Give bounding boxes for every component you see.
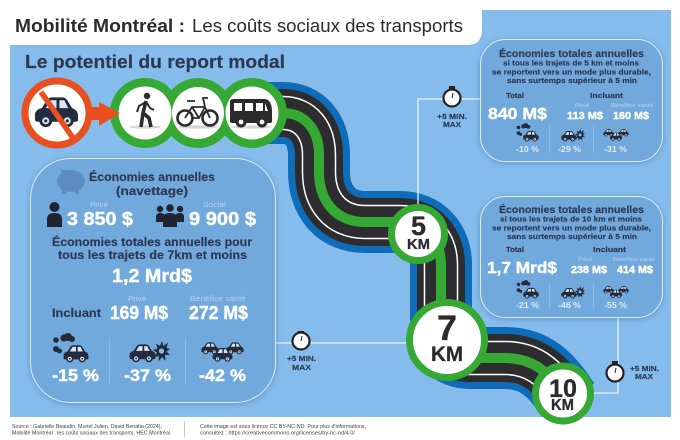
breakdown: 272 M$ xyxy=(189,303,248,323)
heading and conditions: se reportent vers un mode plus durable, xyxy=(492,224,651,232)
private saving: Privé xyxy=(90,202,108,209)
figures: 238 M$ xyxy=(571,265,607,276)
stopwatch: 10 km xyxy=(606,361,659,382)
figures: 1,7 Mrd$ xyxy=(487,260,557,277)
private saving: 3 850 $ xyxy=(67,209,133,229)
percentages: -10 % xyxy=(516,144,539,154)
breakdown: 169 M$ xyxy=(110,303,168,323)
stopwatch: 7 km: MAX xyxy=(292,363,311,372)
panel: 5 km savings xyxy=(480,40,662,162)
figures: Bénéfice santé xyxy=(613,257,655,263)
figures: Privé xyxy=(575,103,589,109)
social saving xyxy=(189,202,256,229)
licence: consultez : https://creativecommons.org/licenses/by-nc-nd/4.0/ xyxy=(200,430,355,436)
breakdown xyxy=(52,296,248,323)
heading: annual savings: (navettage) xyxy=(116,184,188,198)
marker: 5 km xyxy=(392,208,444,260)
percentages xyxy=(52,366,246,385)
icon: no car xyxy=(25,81,89,145)
percentages: -15 % xyxy=(52,366,99,385)
heading and conditions: sans surtemps supérieur à 5 min xyxy=(507,232,637,241)
percentages: -55 % xyxy=(604,300,627,310)
text: total annual savings: tous les trajets de 7km et moins xyxy=(58,248,247,262)
marker: 7 km: KM xyxy=(431,343,463,366)
icon: group xyxy=(156,204,184,227)
figures: Total xyxy=(506,245,524,254)
text: total annual savings xyxy=(52,234,252,262)
stopwatch: 5 km: MAX xyxy=(443,120,461,129)
percentages: -42 % xyxy=(199,366,246,385)
icon: piggy bank xyxy=(57,169,85,194)
text: total annual savings: Économies totales annuelles pour xyxy=(52,234,252,249)
marker: 10 km: KM xyxy=(551,397,574,414)
panel: annual savings, 7 km xyxy=(30,158,276,402)
heading: annual savings: Économies annuelles xyxy=(89,169,215,184)
heading and conditions: si tous les trajets de 10 km et moins xyxy=(500,214,642,224)
figures: Bénéfice santé xyxy=(611,103,653,109)
figures xyxy=(488,91,653,123)
breakdown: Bénéfice santé xyxy=(190,296,246,303)
stopwatch: 7 km xyxy=(287,331,316,372)
figures: 840 M$ xyxy=(488,106,547,123)
icon: accidents xyxy=(561,286,585,299)
title xyxy=(15,16,463,36)
figures: 160 M$ xyxy=(613,111,649,122)
icon: emissions xyxy=(53,333,88,362)
figures: 414 M$ xyxy=(617,265,653,276)
stopwatch: 10 km: MAX xyxy=(635,372,653,381)
icon: congestion xyxy=(603,286,629,298)
licence: Cette image est sous licence CC BY-NC-ND. Pour plus d'informations, xyxy=(200,424,366,430)
stopwatch: 7 km: +5 MIN. xyxy=(287,354,316,363)
percentages: -37 % xyxy=(124,366,171,385)
source xyxy=(12,424,170,436)
number: total: 1,2 Mrd$ xyxy=(112,266,192,286)
icon: emissions xyxy=(517,123,539,142)
panel: 10 km savings xyxy=(480,196,662,318)
marker: 7 km: 7 xyxy=(437,309,457,348)
heading and conditions: sans surtemps supérieur à 5 min xyxy=(507,76,637,85)
heading: annual savings xyxy=(89,169,215,198)
figures: Total xyxy=(506,91,524,100)
marker: 7 km xyxy=(410,302,484,378)
marker: 5 km: 5 xyxy=(411,211,426,241)
heading and conditions xyxy=(492,47,651,85)
heading: report modal: Le potentiel du report modal xyxy=(25,52,285,72)
sustainable modes xyxy=(110,78,287,148)
stopwatch: 5 km: +5 MIN. xyxy=(437,112,467,121)
source: Mobilité Montréal : les coûts sociaux des transports, HEC Montréal xyxy=(12,430,170,436)
percentages xyxy=(516,144,627,154)
icon: bicycle xyxy=(178,98,218,126)
figures: Incluant xyxy=(590,91,624,100)
heading and conditions: si tous les trajets de 5 km et moins xyxy=(503,58,639,68)
heading and conditions: Économies totales annuelles xyxy=(499,47,644,60)
figures xyxy=(487,245,655,277)
percentages: -29 % xyxy=(558,144,581,154)
arrow xyxy=(92,102,120,126)
stopwatch: 10 km: +5 MIN. xyxy=(630,364,659,373)
marker: 5 km: KM xyxy=(407,236,430,253)
figures: 113 M$ xyxy=(567,111,603,122)
stopwatch: 5 km xyxy=(437,86,467,129)
figures: Incluant xyxy=(593,245,627,254)
icon: accidents xyxy=(130,341,170,362)
private saving xyxy=(67,202,133,229)
heading and conditions xyxy=(492,203,651,241)
title: Mobilité Montréal : xyxy=(15,16,185,36)
breakdown: Privé xyxy=(128,296,146,303)
connector lines xyxy=(276,99,618,393)
heading and conditions: Économies totales annuelles xyxy=(499,203,644,216)
percentages xyxy=(516,300,627,310)
heading and conditions: se reportent vers un mode plus durable, xyxy=(492,68,651,76)
percentages: -46 % xyxy=(558,300,581,310)
marker: 10 km: 10 xyxy=(549,375,577,403)
icon: person xyxy=(47,202,62,227)
marker: 10 km xyxy=(536,366,590,421)
icon: pedestrian xyxy=(137,93,154,127)
icon: bus xyxy=(230,99,272,128)
percentages: -21 % xyxy=(516,300,539,310)
road xyxy=(268,113,568,400)
icon: emissions xyxy=(517,280,539,298)
breakdown: Incluant xyxy=(52,306,101,320)
social saving: Social xyxy=(203,202,227,209)
figures: Privé xyxy=(578,257,592,263)
title: Les coûts sociaux des transports xyxy=(192,16,463,36)
icon: congestion xyxy=(201,342,244,362)
icon: accidents xyxy=(561,129,585,142)
percentages: -31 % xyxy=(604,144,627,154)
icon: congestion xyxy=(603,129,629,141)
social saving: 9 900 $ xyxy=(189,209,256,229)
source: Source : Gabrielle Beaudin, Muriel Julien, David Benatia (2024), xyxy=(12,424,162,430)
licence xyxy=(200,424,366,436)
